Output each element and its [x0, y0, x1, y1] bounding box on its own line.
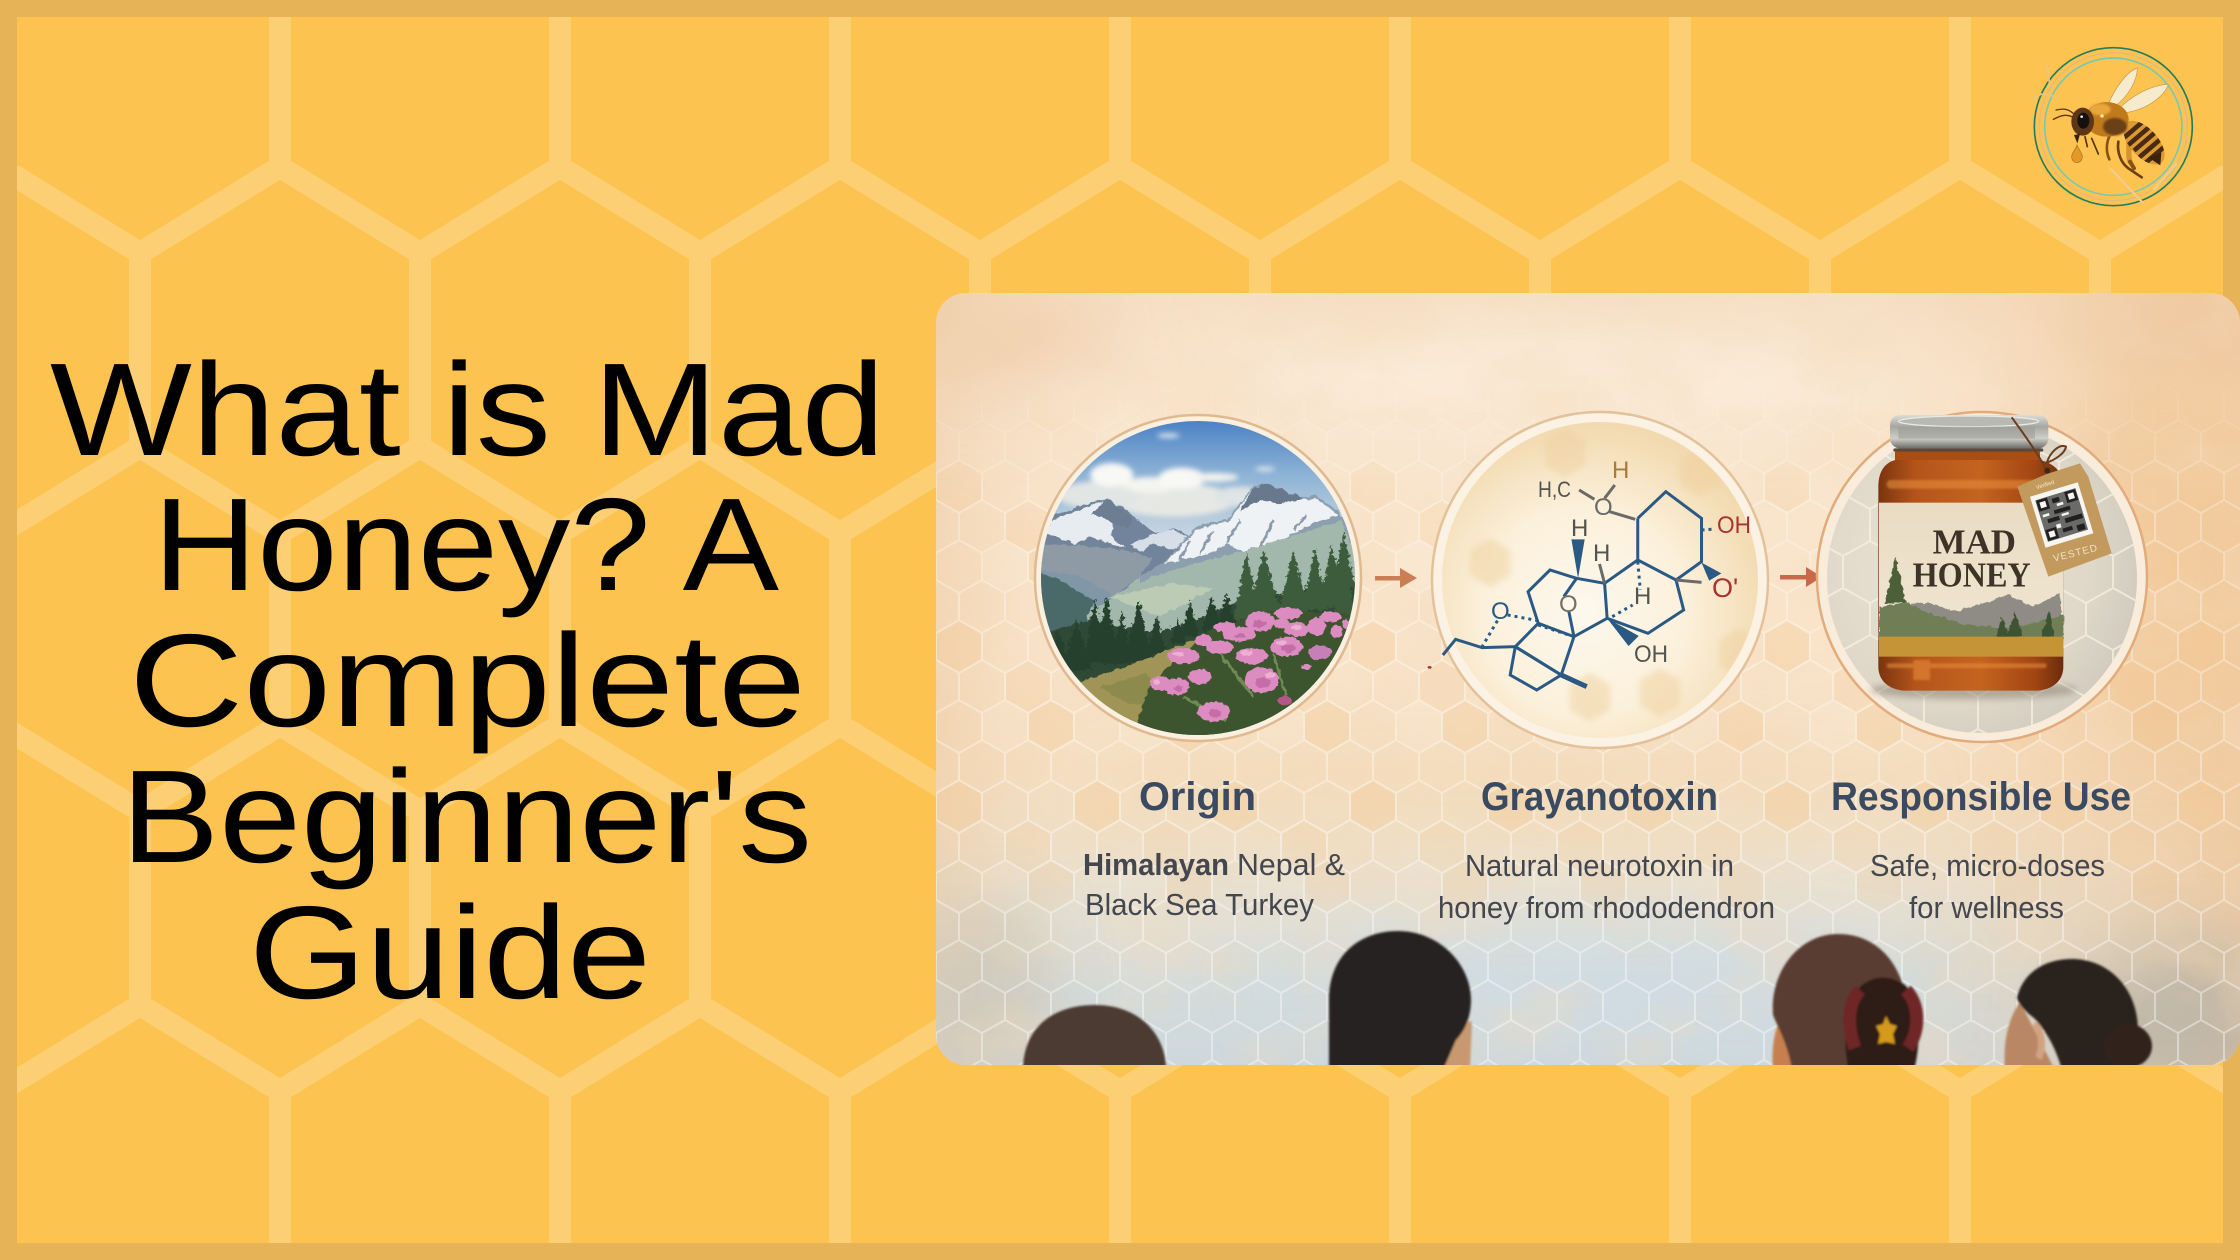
tag string: [2012, 417, 2066, 470]
QR tag: Verified: [2035, 480, 2055, 491]
jar shadow: [1870, 681, 2077, 699]
title: What is Mad: [50, 336, 885, 483]
head 4: [2005, 959, 2152, 1070]
bee body: [2071, 102, 2165, 166]
molecule labels: O: [1491, 598, 1510, 625]
molecule labels: H,C: [1538, 477, 1571, 502]
paper mottling: [992, 374, 2240, 1065]
origin description: Himalayan: [1083, 847, 1229, 882]
title: Complete: [129, 607, 806, 754]
molecule labels: H: [1634, 583, 1651, 610]
jar neck: [1895, 448, 2040, 467]
honeycomb cells: [937, 464, 2240, 908]
honey jar: [1870, 415, 2112, 699]
arrow: grayanotoxin to responsible use: [1780, 567, 1816, 587]
QR tag: VESTED: [2052, 543, 2099, 565]
origin heading: Origin: [1139, 775, 1256, 819]
molecule labels: O': [1712, 573, 1738, 603]
origin description: [1083, 847, 1345, 922]
title: Honey? A: [153, 471, 779, 618]
panel edge shading: [936, 293, 2240, 1065]
bee wings: [2108, 68, 2168, 113]
molecule labels: H: [1593, 540, 1610, 567]
bee legs and antennae: [2053, 109, 2142, 177]
grayanotoxin description: Natural neurotoxin in: [1465, 848, 1734, 883]
honeycomb lines: [936, 412, 2240, 1065]
jar lid: [1890, 415, 2048, 452]
molecule ring: [1432, 412, 1768, 748]
circle: grayanotoxin molecule: [1428, 412, 1768, 748]
responsible use description: for wellness: [1909, 890, 2064, 925]
audience heads: [1023, 931, 2152, 1070]
molecule disc: [1442, 422, 1758, 738]
molecule labels: H: [1612, 457, 1629, 484]
column: grayanotoxin: [1438, 775, 1775, 925]
label text: MAD: [1933, 523, 2016, 561]
responsible use description: [1870, 848, 2105, 925]
molecule labels: O: [1559, 591, 1578, 618]
grayanotoxin heading: Grayanotoxin: [1481, 775, 1718, 819]
jar label: [1879, 503, 2063, 657]
grayanotoxin description: [1438, 848, 1775, 925]
glass highlights: [1887, 480, 2047, 680]
head 1: [1023, 1005, 1166, 1070]
warm watercolor patches: [880, 290, 2240, 1100]
grayanotoxin description: honey from rhododendron: [1438, 890, 1775, 925]
label text: [1913, 523, 2031, 595]
origin description: Black Sea Turkey: [1085, 887, 1314, 922]
head 2: [1329, 931, 1472, 1070]
molecule labels: OH: [1634, 641, 1668, 668]
title: [50, 336, 885, 1026]
honey drop: [2072, 145, 2082, 163]
arrow: origin to grayanotoxin: [1375, 568, 1417, 588]
disc honeycomb: [1827, 423, 2137, 733]
title: Beginner's: [121, 743, 812, 890]
origin description: Nepal &: [1237, 847, 1345, 882]
landscape photo: [1040, 420, 1367, 747]
QR tag: [2017, 463, 2112, 577]
molecule labels: [1491, 457, 1751, 668]
honeycomb spots: [1470, 428, 1755, 722]
panel: mad honey illustration: [880, 290, 2240, 1100]
column: origin: [1083, 775, 1345, 922]
column: responsible use: [1831, 775, 2131, 925]
logo: bee in rings: [2032, 48, 2192, 206]
origin ring: [1035, 415, 1361, 741]
label text: HONEY: [1913, 557, 2031, 595]
panel background: [936, 293, 2240, 1065]
responsible use heading: Responsible Use: [1831, 775, 2131, 819]
jar body: [1878, 460, 2063, 691]
molecule bonds: [1428, 485, 1721, 690]
molecule labels: H: [1571, 515, 1588, 542]
responsible use description: Safe, micro-doses: [1870, 848, 2105, 883]
jar ring: [1817, 412, 2147, 742]
molecule labels: O: [1594, 494, 1613, 521]
grey honeycomb disc: [1827, 423, 2137, 733]
circle: origin landscape: [1035, 415, 1367, 747]
molecule labels: OH: [1717, 512, 1751, 539]
head 3: [1772, 934, 1919, 1070]
title: Guide: [249, 879, 651, 1026]
logo rings: [2032, 48, 2192, 206]
circle: responsible use jar: [1817, 412, 2147, 742]
